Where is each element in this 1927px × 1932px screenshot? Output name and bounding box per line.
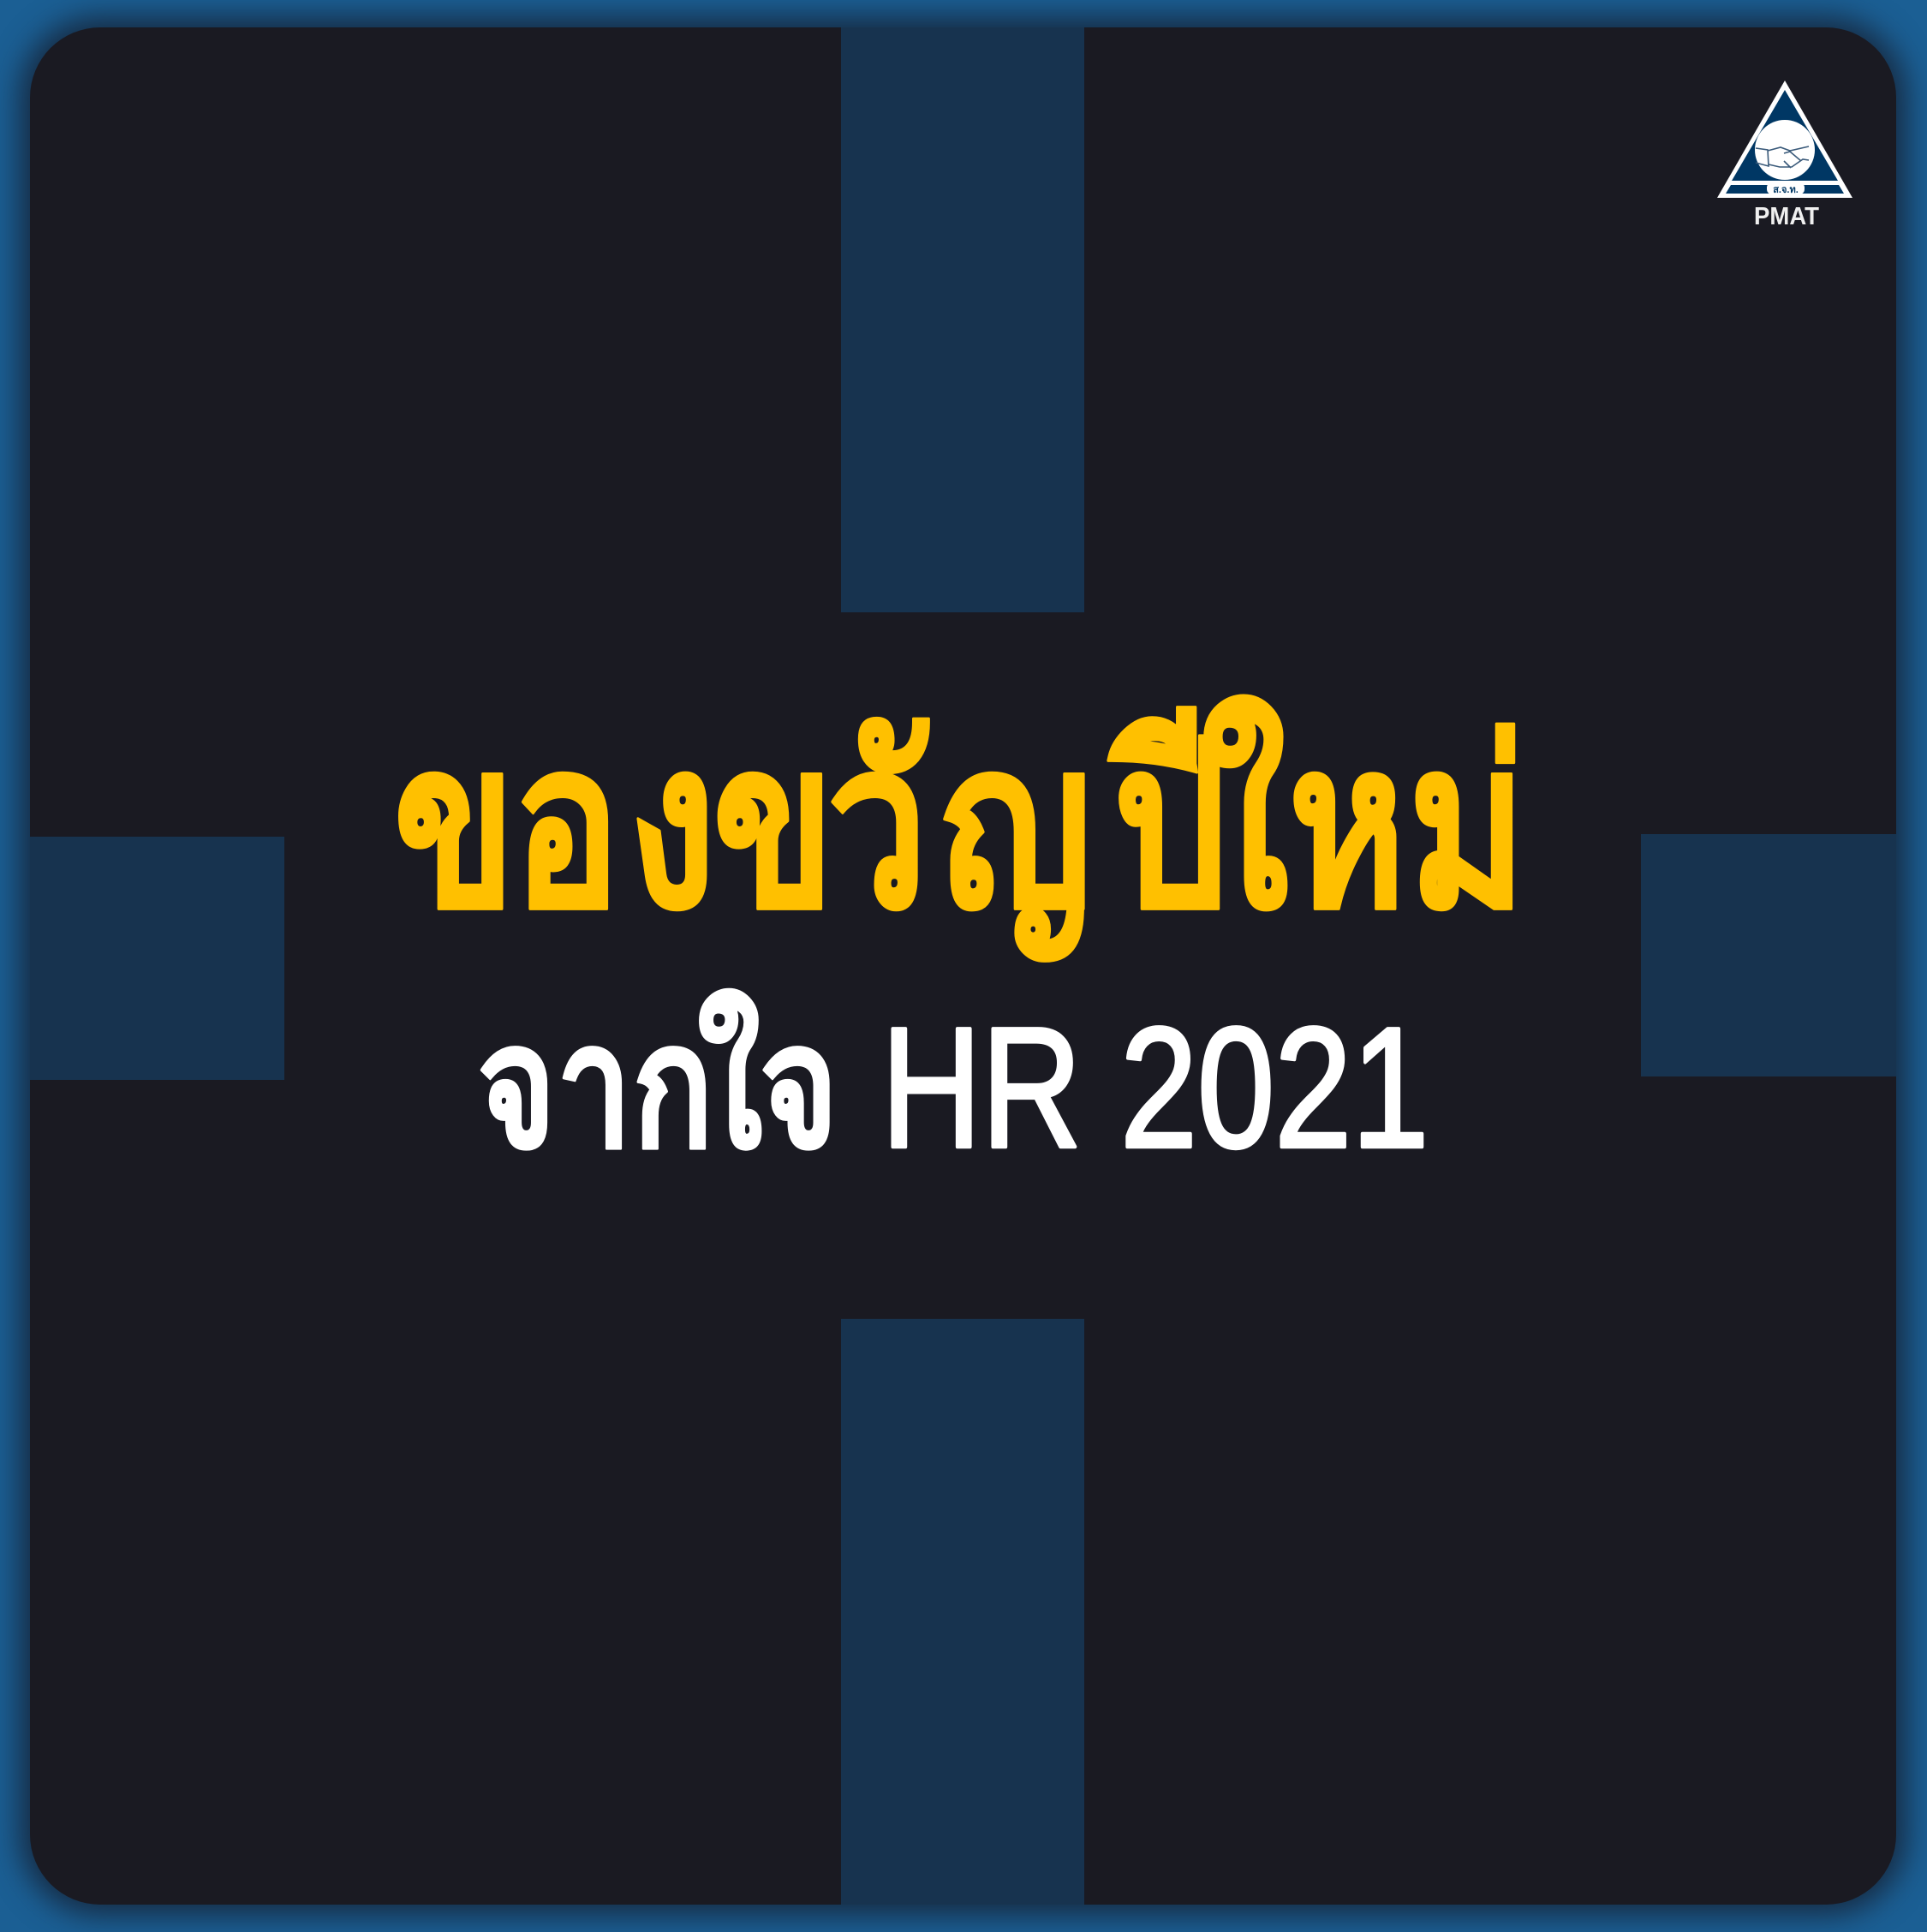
title: yellow headline: ง bbox=[629, 697, 715, 954]
title: yellow headline: ใ bbox=[1202, 695, 1288, 954]
decorative bar: left bbox=[30, 837, 284, 1080]
subtitle: white headline: จ bbox=[478, 990, 555, 1183]
icon: badge with initials bbox=[1767, 182, 1805, 195]
decorative bar: top bbox=[841, 27, 1084, 612]
title: yellow headline: ห bbox=[1289, 697, 1405, 954]
subtitle: white headline: ใ bbox=[698, 989, 762, 1183]
icon: handshake circle bbox=[1755, 120, 1815, 180]
title: yellow headline: ปี bbox=[1107, 697, 1226, 954]
title: yellow headline: ข bbox=[713, 697, 834, 954]
subtitle: white headline: HR 2021 bbox=[881, 992, 1429, 1184]
title: yellow headline: ม่ bbox=[1409, 697, 1526, 954]
title: yellow headline: ญ bbox=[940, 697, 1091, 961]
title: yellow headline: ข bbox=[394, 697, 515, 954]
icon: triangle outline bbox=[1717, 80, 1852, 198]
logo label: PMAT bbox=[1754, 203, 1819, 230]
decorative bar: bottom bbox=[841, 1319, 1084, 1905]
logo: PMAT triangle emblem bbox=[1717, 80, 1852, 230]
subtitle: white headline: จ bbox=[761, 990, 838, 1183]
title: yellow headline: วั bbox=[828, 697, 929, 954]
subtitle: white headline: า bbox=[558, 990, 631, 1183]
decorative bar: right bbox=[1641, 834, 1896, 1076]
icon: badge with initials: ส.จ.ท. bbox=[1773, 185, 1799, 195]
title: yellow headline: อ bbox=[513, 697, 620, 954]
subtitle: white headline: ก bbox=[633, 990, 713, 1183]
